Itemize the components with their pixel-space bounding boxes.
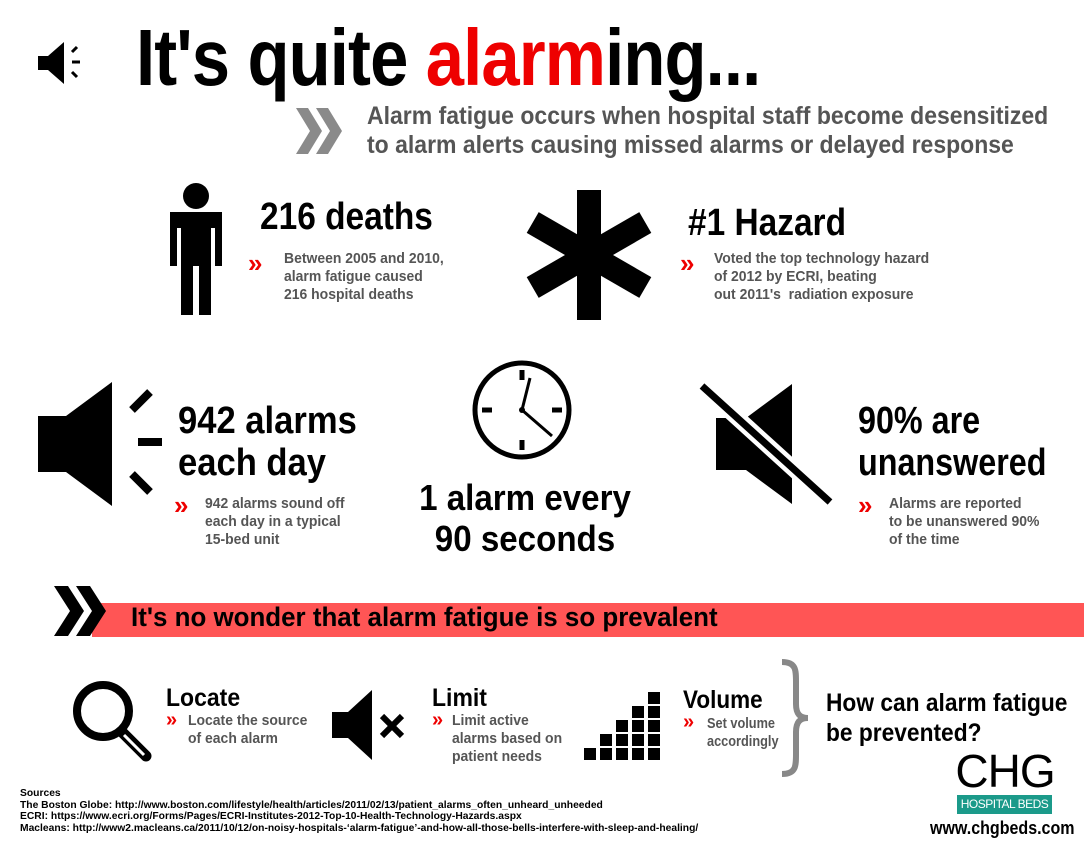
banner: It's no wonder that alarm fatigue is so prevalent xyxy=(131,602,718,632)
logo: CHG xyxy=(955,745,1055,797)
question xyxy=(826,689,1067,747)
tip: Limit: patient needs xyxy=(452,748,542,765)
red chevron: » xyxy=(174,490,188,520)
stat: 90% unanswered: to be unanswered 90% xyxy=(889,513,1039,530)
question: How can alarm fatigue xyxy=(826,689,1067,717)
stat: #1 Hazard: out 2011's radiation exposure xyxy=(714,286,913,303)
stat: 90% unanswered: of the time xyxy=(889,531,960,548)
website: www.chgbeds.com xyxy=(930,818,1075,838)
question: be prevented? xyxy=(826,719,981,747)
icon: magnifier xyxy=(73,681,152,762)
sources xyxy=(20,788,698,834)
tip: Locate: Locate the source xyxy=(188,712,307,729)
red chevron: » xyxy=(858,490,872,520)
red chevron: » xyxy=(680,248,694,278)
icon: gray chevrons xyxy=(296,108,342,154)
tip: Volume xyxy=(683,686,779,750)
banner xyxy=(54,586,1084,637)
icon: muted speaker xyxy=(700,383,832,505)
icon: small speaker xyxy=(38,42,80,84)
icon: speaker x xyxy=(332,690,404,760)
title: It's quite alarming... xyxy=(136,13,760,102)
tip: Limit: Limit active xyxy=(452,712,529,729)
tip: Limit: Limit xyxy=(432,684,487,712)
brace xyxy=(782,659,808,777)
tip: Limit: alarms based on xyxy=(452,730,562,747)
stat: 942 alarms: 942 alarms sound off xyxy=(205,495,345,512)
stat: 1 alarm every 90 seconds: 1 alarm every xyxy=(419,477,631,518)
stat: 216 deaths: 216 deaths xyxy=(260,196,433,238)
stat: 942 alarms: 15-bed unit xyxy=(205,531,279,548)
tip: Limit: » xyxy=(432,709,443,731)
tip: Volume: Set volume xyxy=(707,715,775,732)
sources: The Boston Globe: http://www.boston.com/lifestyle/health/articles/2011/02/13/patient_alarms_often_unheard_unheeded xyxy=(20,800,603,810)
stat: 942 alarms: each day xyxy=(178,442,326,484)
tip: Volume: » xyxy=(683,711,694,733)
stat: #1 Hazard: #1 Hazard xyxy=(688,202,846,244)
stat: 942 alarms: 942 alarms xyxy=(178,400,357,442)
stat: 942 alarms: each day in a typical xyxy=(205,513,341,530)
stat: #1 Hazard xyxy=(680,202,929,303)
stat: 90% unanswered xyxy=(858,400,1046,548)
stat: 90% unanswered: 90% are xyxy=(858,400,980,442)
sources: Sources xyxy=(20,788,61,799)
stat: 216 deaths: Between 2005 and 2010, xyxy=(284,250,444,267)
icon: black chevrons xyxy=(54,586,106,636)
subtitle xyxy=(367,102,1048,159)
red chevron: » xyxy=(248,248,262,278)
subtitle: to alarm alerts causing missed alarms or delayed response xyxy=(367,131,1014,159)
stat: #1 Hazard: of 2012 by ECRI, beating xyxy=(714,268,877,285)
stat: 942 alarms xyxy=(174,400,357,548)
stat: 1 alarm every 90 seconds: 90 seconds xyxy=(435,518,615,559)
tip: Volume: accordingly xyxy=(707,733,779,750)
subtitle: Alarm fatigue occurs when hospital staff become desensitized xyxy=(367,102,1048,130)
tip: Locate: of each alarm xyxy=(188,730,278,747)
stat: 1 alarm every 90 seconds xyxy=(419,477,631,559)
icon: asterisk xyxy=(526,190,652,320)
tip: Locate: » xyxy=(166,709,177,731)
sources: ECRI: https://www.ecri.org/Forms/Pages/ECRI-Institutes-2012-Top-10-Health-Technology-Hazards.aspx xyxy=(20,811,522,822)
stat: 90% unanswered: Alarms are reported xyxy=(889,495,1022,512)
tip: Limit xyxy=(432,684,562,765)
icon: clock xyxy=(472,360,572,460)
stat: 90% unanswered: unanswered xyxy=(858,442,1046,484)
sources: Macleans: http://www2.macleans.ca/2011/10/12/on-noisy-hospitals-‘alarm-fatigue’-and-how-all-those-bells-interfere-with-sleep-and-healing/ xyxy=(20,822,698,834)
logo: HOSPITAL BEDS xyxy=(961,797,1048,811)
tip: Volume: Volume xyxy=(683,686,763,714)
icon: large speaker xyxy=(38,382,162,506)
stat: 216 deaths: 216 hospital deaths xyxy=(284,286,413,303)
icon: volume bars xyxy=(584,692,660,760)
stat: 216 deaths xyxy=(248,196,444,303)
stat: #1 Hazard: Voted the top technology hazard xyxy=(714,250,929,267)
tip: Locate: Locate xyxy=(166,684,240,712)
tip: Locate xyxy=(166,684,307,747)
icon: person xyxy=(170,183,222,315)
stat: 216 deaths: alarm fatigue caused xyxy=(284,268,423,285)
